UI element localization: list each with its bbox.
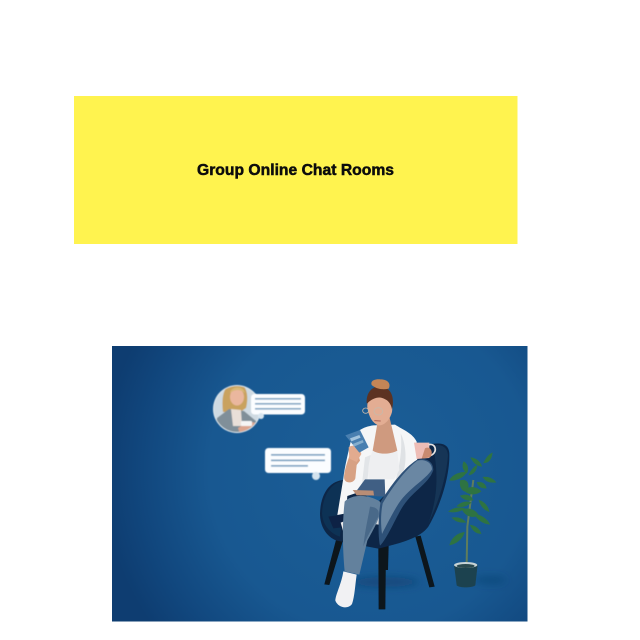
tank top [368, 451, 399, 479]
seated woman and armchair [320, 379, 449, 609]
stem [467, 480, 473, 563]
crossed leg [379, 459, 433, 546]
phone [345, 430, 369, 453]
photo panel: woman using phone in armchair [112, 346, 528, 622]
back foot, sole in shadow [328, 514, 348, 528]
raised forearm [344, 453, 360, 482]
white shirt [337, 425, 417, 515]
chair legs [324, 536, 435, 609]
glasses [363, 408, 383, 415]
leaves [449, 453, 495, 545]
hair [367, 386, 393, 409]
head [367, 393, 392, 425]
chat bubble: bottom [265, 448, 331, 480]
jeans waist and lap [357, 479, 385, 497]
pot [454, 562, 478, 587]
lower thigh and shin [343, 496, 381, 575]
floor shadows [351, 576, 506, 587]
chat bubble: top [251, 394, 305, 419]
title banner [74, 96, 518, 244]
title: Group Online Chat Rooms [197, 162, 394, 179]
armchair [320, 444, 449, 549]
mouth [374, 419, 381, 422]
sock [335, 571, 357, 607]
avatar: woman with phone [213, 383, 261, 434]
hand with mug [414, 443, 429, 459]
potted plant [449, 453, 495, 587]
neck and chest [373, 417, 397, 454]
